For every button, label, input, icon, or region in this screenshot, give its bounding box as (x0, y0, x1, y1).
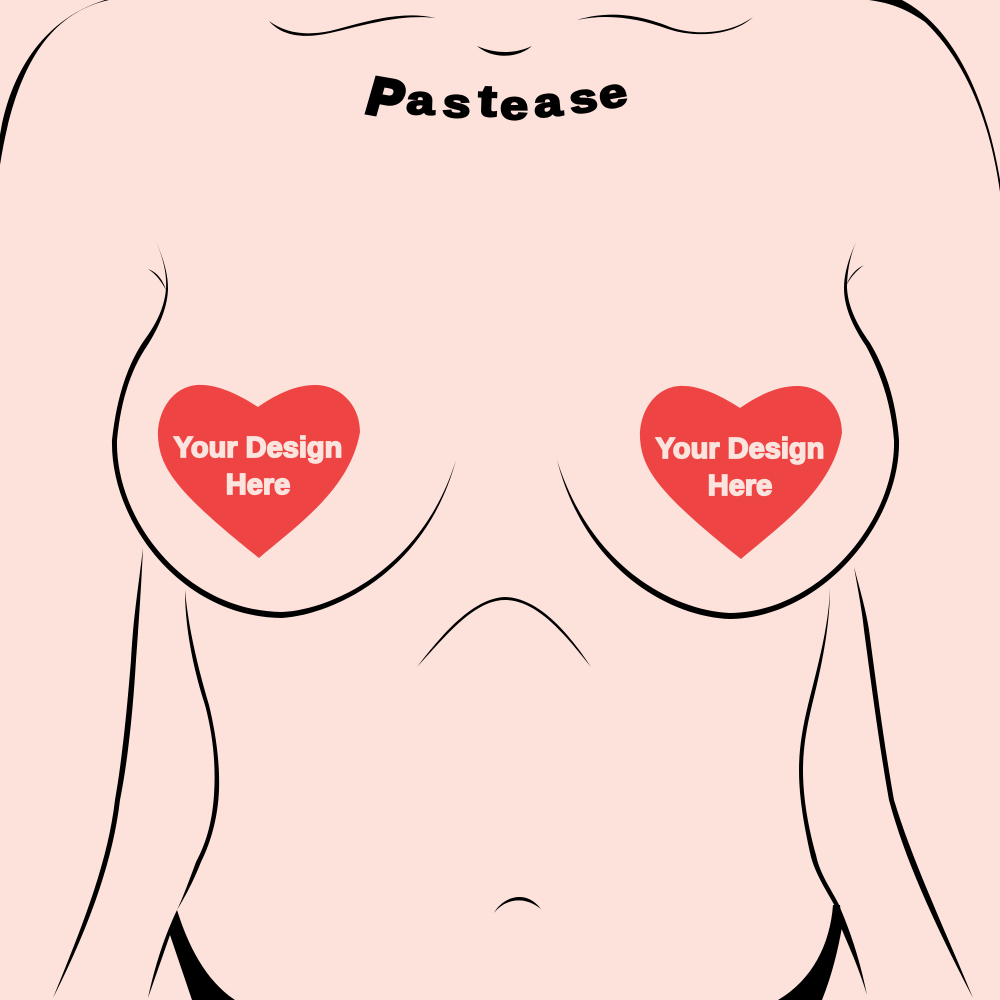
logo: Pastease: a (532, 79, 565, 126)
navel (494, 897, 541, 913)
right heart: Here (708, 470, 772, 502)
right shoulder line (869, 0, 1000, 192)
rib cage arch (417, 597, 591, 667)
left collarbone (269, 15, 436, 36)
right arm line (854, 567, 973, 998)
neck notch (477, 46, 532, 56)
right underarm crease (846, 265, 864, 286)
right heart (640, 386, 842, 559)
left underarm crease (148, 269, 166, 290)
left arm line (53, 548, 143, 998)
logo: Pastease: e (500, 83, 528, 128)
logo: Pastease: t (478, 76, 498, 126)
left heart (158, 385, 360, 558)
left shoulder line (0, 0, 109, 165)
right hip garment (778, 905, 842, 1000)
logo letter P: P (361, 68, 411, 130)
logo: Pastease: s (442, 80, 472, 127)
left waist line (177, 590, 219, 910)
left heart: Here (226, 469, 290, 501)
logo: Pastease: s (566, 74, 600, 123)
logo: Pastease: a (406, 77, 436, 123)
right waist line (799, 588, 840, 911)
left hip garment (148, 910, 235, 1000)
right heart label: Your Design (656, 433, 824, 465)
right breast contour (557, 240, 899, 619)
logo: Pastease (361, 68, 630, 130)
left heart label: Your Design (174, 432, 342, 464)
logo: Pastease: e (595, 69, 630, 118)
right hip line (838, 903, 867, 995)
left breast contour (112, 239, 456, 618)
right collarbone (577, 15, 753, 34)
